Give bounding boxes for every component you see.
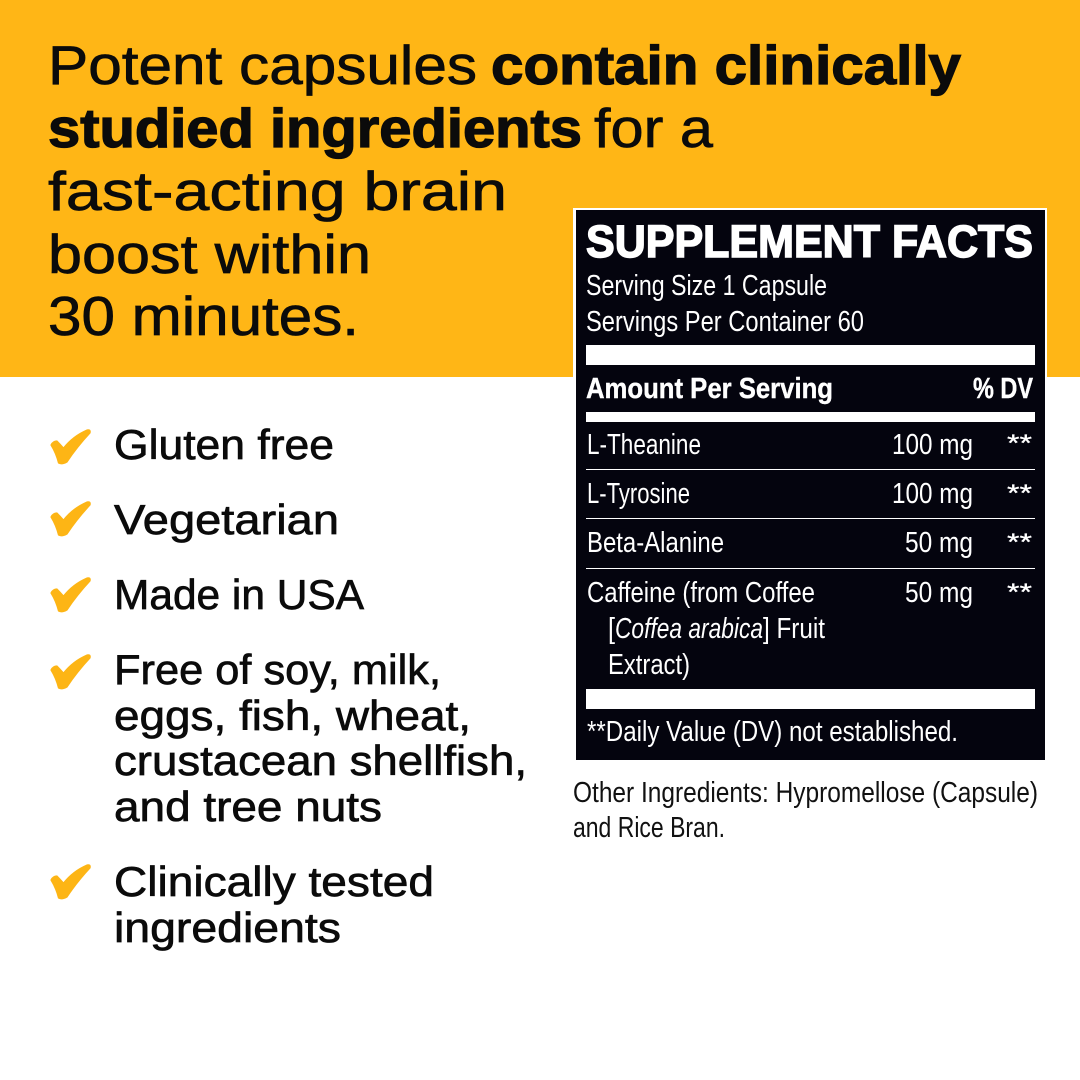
serving info: Serving Size 1 Capsule — [586, 270, 827, 302]
headline: contain clinically — [491, 34, 961, 96]
headline: boost within — [48, 223, 371, 285]
item: allergen free: eggs, fish, wheat, — [114, 692, 471, 739]
table header — [586, 373, 1034, 405]
footnote: **Daily Value (DV) not established. — [587, 716, 958, 748]
row: L-Theanine: 100 mg — [892, 429, 973, 461]
table header: Amount Per Serving — [586, 373, 833, 405]
row: Caffeine: [ — [608, 613, 615, 645]
headline: fast-acting brain — [48, 160, 507, 222]
item: gluten free: Gluten free — [114, 421, 334, 468]
item: allergen free: Free of soy, milk, — [114, 646, 441, 693]
row: L-Theanine: ** — [1007, 430, 1032, 457]
row: L-Tyrosine — [587, 478, 1032, 510]
row: Caffeine: Caffeine (from Coffee — [587, 577, 815, 609]
serving info: Servings Per Container 60 — [586, 306, 864, 338]
headline: Potent capsules — [48, 34, 477, 96]
row: L-Theanine: L-Theanine — [587, 429, 701, 461]
row: L-Tyrosine: L-Tyrosine — [587, 478, 690, 510]
row: Beta-Alanine: Beta-Alanine — [587, 527, 724, 559]
item: clinically tested: Clinically tested — [114, 858, 434, 905]
row: Beta-Alanine: ** — [1007, 529, 1032, 556]
row: Caffeine: ** — [1007, 579, 1032, 606]
panel title: SUPPLEMENT FACTS — [586, 216, 1033, 267]
headline: for a — [594, 97, 713, 159]
row: Caffeine: 50 mg — [905, 577, 973, 609]
serving info — [586, 270, 864, 338]
headline: 30 minutes. — [48, 285, 359, 347]
item: clinically tested: ingredients — [114, 904, 341, 951]
table header: % DV — [973, 373, 1034, 405]
item: vegetarian — [51, 496, 339, 543]
row: L-Tyrosine: ** — [1007, 480, 1032, 507]
other ingredients note: and Rice Bran. — [573, 812, 725, 844]
headline — [48, 34, 961, 347]
row: Beta-Alanine — [587, 527, 1032, 559]
row: L-Tyrosine: 100 mg — [892, 478, 973, 510]
row: Caffeine: Extract) — [608, 649, 690, 681]
row: Caffeine: ] Fruit — [763, 613, 825, 645]
row: Beta-Alanine: 50 mg — [905, 527, 973, 559]
panel: supplement facts — [573, 208, 1047, 762]
item: made in USA: Made in USA — [114, 571, 364, 618]
other ingredients note — [573, 777, 1038, 844]
headline: studied ingredients — [48, 97, 582, 159]
row: L-Theanine — [587, 429, 1032, 461]
yellow header band — [0, 0, 1080, 377]
row: Caffeine — [587, 577, 1032, 681]
item: allergen free — [51, 646, 527, 830]
row: Caffeine: Coffea arabica — [615, 613, 763, 645]
item: clinically tested — [51, 858, 434, 951]
item: allergen free: crustacean shellfish, — [114, 737, 527, 784]
item: vegetarian: Vegetarian — [114, 496, 339, 543]
checklist — [51, 421, 527, 951]
item: allergen free: and tree nuts — [114, 783, 382, 830]
